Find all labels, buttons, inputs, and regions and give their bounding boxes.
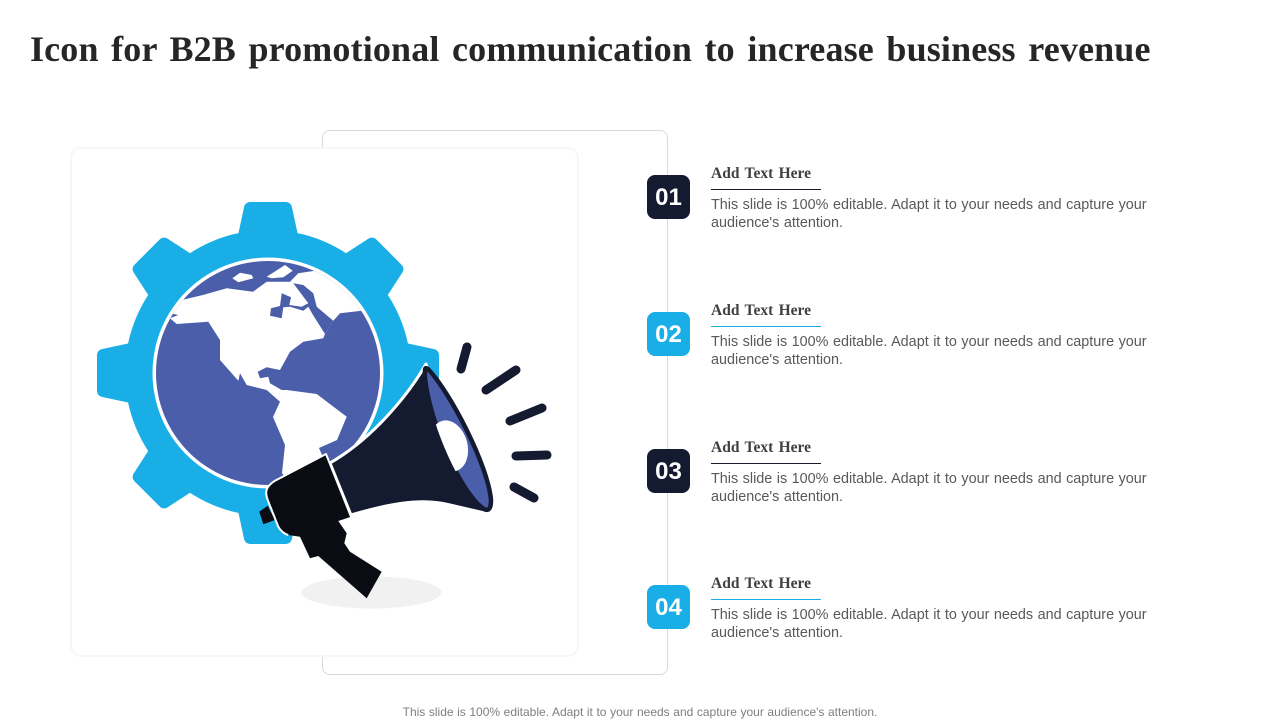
text 04: audience's attention. [711,625,843,641]
badge 04 [647,585,690,629]
panel: white illustration card [70,147,579,657]
white edge of megaphone body [266,454,351,535]
item 03 [647,439,1147,505]
text 02: audience's attention. [711,352,843,368]
handle grip tab [259,506,275,524]
badge 04: 04 [655,594,682,621]
text 04 [711,607,1147,641]
text 02 [711,334,1147,368]
badge 02 [647,312,690,356]
Arctic islands [232,265,293,282]
text 03: This slide is 100% editable. Adapt it to your needs and capture your [711,471,1147,487]
item 04 [647,575,1147,641]
heading 03: Add Text Here [711,439,811,456]
badge 01 [647,175,690,219]
badge 02: 02 [655,321,682,348]
underline 03 [711,463,821,464]
text 01 [711,197,1147,231]
text 01: audience's attention. [711,215,843,231]
illustration: globe gear and megaphone [97,202,552,608]
text 01: This slide is 100% editable. Adapt it to your needs and capture your [711,197,1147,213]
panel: outlined back frame [322,130,668,675]
badge 01: 01 [655,184,682,211]
item 02 [647,302,1147,368]
Hudson Bay [270,283,333,334]
text 03 [711,471,1147,505]
megaphone body and handle [266,454,382,598]
text 04: This slide is 100% editable. Adapt it to your needs and capture your [711,607,1147,623]
underline 02 [711,326,821,327]
icon: megaphone [259,347,547,598]
sound waves [461,347,547,498]
heading 01: Add Text Here [711,165,811,182]
heading 02: Add Text Here [711,302,811,319]
underline 04 [711,599,821,600]
continents: North and South America [170,271,361,476]
footer note: This slide is 100% editable. Adapt it to your needs and capture your audience's attention. [403,705,877,719]
item 01 [647,165,1147,231]
text 02: This slide is 100% editable. Adapt it to your needs and capture your [711,334,1147,350]
heading 04: Add Text Here [711,575,811,592]
badge 03: 03 [655,458,682,485]
icon: gear [103,208,433,538]
horn cone [330,364,489,515]
underline 01 [711,189,821,190]
shadow under megaphone [302,576,442,608]
horn mouth with rim [425,368,491,510]
title: Icon for B2B promotional communication to increase business revenue [30,29,1151,69]
text 03: audience's attention. [711,489,843,505]
speaker opening [436,420,468,472]
badge 03 [647,449,690,493]
icon: globe [150,258,385,500]
